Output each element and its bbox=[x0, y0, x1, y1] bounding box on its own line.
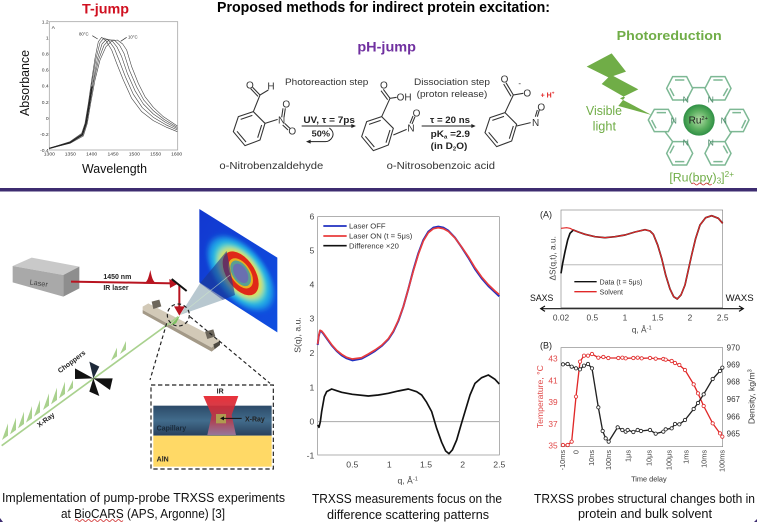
molecule: o-nitrosobenzoate: O bbox=[537, 103, 545, 114]
arrow: photoreaction: 50% bbox=[312, 128, 330, 138]
chart: S(q) scattering curves: 2.5 bbox=[493, 460, 506, 470]
molecule: o-nitrosobenzoate: - bbox=[518, 79, 521, 88]
chart: absorbance vs wavelength: 1600 bbox=[171, 151, 182, 157]
chart: absorbance vs wavelength: 0 bbox=[46, 116, 49, 122]
caption: setup: at BioCARS (APS, Argonne) [3] bbox=[61, 506, 225, 521]
chart: absorbance vs wavelength: 0.4 bbox=[42, 84, 49, 90]
temperature axis: 43 bbox=[548, 354, 558, 364]
time axis: 0 bbox=[571, 450, 580, 454]
arrow: dissociation: a bbox=[444, 135, 447, 141]
caption: structural changes bbox=[534, 491, 755, 521]
label: visible light: Visible bbox=[586, 104, 622, 118]
Ru centre: 2+ bbox=[701, 116, 709, 122]
x-ray beam bbox=[2, 316, 180, 446]
molecule: Ru(bpy)3: N bbox=[721, 116, 727, 126]
axis labels: -1 bbox=[307, 451, 315, 461]
inset: capillary cross-section: X-Ray bbox=[245, 417, 265, 424]
heading: pH-jump: pH-jump bbox=[357, 39, 416, 55]
axis labels: 2 bbox=[310, 348, 315, 358]
molecule: o-nitrobenzaldehyde: N bbox=[278, 116, 285, 127]
legend bbox=[574, 279, 642, 296]
arrow: dissociation: =2.9 bbox=[447, 129, 470, 139]
chart: absorbance vs wavelength bbox=[40, 19, 182, 157]
molecule: o-nitrosobenzoic acid bbox=[362, 81, 421, 151]
caption: structural changes: protein and bulk solvent bbox=[578, 506, 712, 521]
detector image bbox=[199, 209, 277, 332]
temperature axis: 37 bbox=[548, 419, 558, 429]
time axis: 10ms bbox=[700, 450, 709, 468]
panel: photoreduction: light bbox=[593, 120, 616, 134]
legend: Solvent bbox=[600, 289, 623, 296]
axis labels: 2 bbox=[688, 312, 693, 322]
arrow: photoreaction: UV, τ = 7ps bbox=[303, 115, 355, 125]
Ru centre bbox=[683, 104, 715, 136]
molecule: o-nitrobenzaldehyde: O bbox=[288, 127, 296, 138]
chart: absorbance vs wavelength: 80°C bbox=[79, 32, 89, 37]
chart: absorbance vs wavelength: 1 bbox=[46, 35, 49, 41]
molecule: o-nitrosobenzoic acid: O bbox=[380, 81, 388, 92]
caption: setup bbox=[2, 490, 285, 522]
time axis: 1ms bbox=[681, 450, 690, 464]
chart: S(q) scattering curves: 1.5 bbox=[420, 460, 432, 470]
chart: S(q) scattering curves: -1 bbox=[413, 477, 418, 483]
curves bbox=[318, 227, 499, 454]
axis labels: 4 bbox=[310, 280, 315, 290]
chart: absorbance vs wavelength: A bbox=[52, 25, 56, 31]
caption: difference patterns bbox=[312, 491, 502, 522]
formula label: [Ru(bpy) bbox=[669, 171, 715, 185]
panel: TRXSS setup bbox=[2, 209, 277, 469]
caption: difference patterns: TRXSS measurements focus on the bbox=[312, 491, 502, 506]
legend: Laser OFF bbox=[349, 222, 386, 231]
reaction labels bbox=[219, 77, 495, 172]
chart: S(q) scattering curves: 2 bbox=[460, 460, 465, 470]
SAXS WAXS range arrow: SAXS bbox=[530, 293, 553, 303]
time axis: 10μs bbox=[645, 450, 654, 466]
chart B: temperature and density time course: (B) bbox=[540, 340, 552, 350]
axis labels: 1 bbox=[310, 382, 315, 392]
axis labels bbox=[307, 211, 315, 461]
proton label: + H bbox=[541, 92, 552, 99]
capillary stage bbox=[143, 300, 220, 352]
inset: capillary cross-section: Capillary bbox=[157, 426, 186, 433]
x axis label: Wavelength bbox=[82, 162, 147, 176]
panel: photoreduction bbox=[586, 29, 749, 186]
temperature axis: 35 bbox=[548, 441, 558, 451]
curves bbox=[561, 216, 723, 299]
reaction labels: Photoreaction step bbox=[285, 77, 368, 87]
time axis bbox=[558, 450, 727, 484]
chart A: difference signal vs solvent bbox=[530, 210, 754, 334]
axis labels: 2.5 bbox=[717, 312, 729, 322]
panel: pH-jump bbox=[219, 39, 555, 172]
molecule: Ru(bpy)3: N bbox=[708, 94, 714, 104]
corner marks bbox=[0, 518, 757, 522]
time axis: 1μs bbox=[624, 450, 633, 462]
chart: absorbance vs wavelength: 1550 bbox=[150, 151, 161, 157]
heading: T-jump: T-jump bbox=[82, 0, 129, 16]
laser beam arrow bbox=[71, 270, 185, 316]
axis labels: 1.5 bbox=[652, 312, 664, 322]
time axis: Time delay bbox=[631, 475, 667, 484]
chart: absorbance vs wavelength: 1450 bbox=[107, 151, 119, 157]
panel: T-jump bbox=[18, 0, 182, 176]
heading: Photoreduction: Photoreduction bbox=[617, 29, 722, 43]
arrow: dissociation: 2 bbox=[453, 147, 456, 153]
temperature axis: 41 bbox=[548, 375, 558, 385]
density axis: 966 bbox=[727, 412, 741, 421]
divider band bbox=[0, 188, 757, 192]
chart: absorbance vs wavelength: -0.2 bbox=[40, 132, 49, 138]
SAXS WAXS range arrow: WAXS bbox=[726, 293, 754, 303]
axis labels: ΔS(q,t), a.u. bbox=[548, 236, 558, 281]
chart A: difference signal vs solvent: (A) bbox=[540, 210, 552, 220]
proton label: + bbox=[552, 91, 555, 96]
arrow: dissociation: τ = 20 ns bbox=[430, 115, 470, 125]
time axis: 100ns bbox=[604, 450, 613, 470]
density axis: 967 bbox=[727, 395, 741, 404]
molecule: o-nitrosobenzoic acid: N bbox=[407, 124, 415, 135]
time axis: 100μs bbox=[664, 450, 673, 470]
laser box bbox=[13, 258, 79, 297]
molecule: o-nitrosobenzoate: O bbox=[523, 89, 531, 100]
formula label: 2+ bbox=[725, 170, 734, 179]
inset: capillary cross-section bbox=[151, 385, 273, 469]
legend: Difference ×20 bbox=[349, 241, 399, 250]
zoom circle and guide lines bbox=[150, 304, 270, 383]
laser box: Laser bbox=[29, 277, 49, 289]
arrow: dissociation: O) bbox=[456, 141, 467, 151]
chart: absorbance vs wavelength: 0.8 bbox=[42, 51, 49, 57]
inset: capillary cross-section: IR bbox=[217, 388, 224, 395]
chart B: temperature and density time course bbox=[535, 340, 756, 484]
molecule: Ru(bpy)3: N bbox=[683, 94, 689, 104]
chopper label: Choppers bbox=[57, 350, 87, 375]
chart: S(q) scattering curves bbox=[293, 211, 506, 485]
axis labels: 1 bbox=[623, 312, 628, 322]
x-ray label: X-Ray bbox=[36, 412, 56, 429]
chart: absorbance vs wavelength: 10°C bbox=[128, 35, 138, 40]
axis labels: 3 bbox=[310, 314, 315, 324]
reaction labels: (proton release) bbox=[417, 89, 487, 99]
caption: setup: Implementation of pump-probe TRXSS experiments bbox=[2, 490, 285, 505]
arrow: dissociation: (in D bbox=[431, 141, 451, 151]
time axis: 100ms bbox=[718, 450, 727, 472]
chart: absorbance vs wavelength: -0.4 bbox=[40, 148, 49, 154]
density axis: 970 bbox=[727, 343, 741, 352]
temperature axis: Temperature, °C bbox=[535, 365, 545, 428]
chart: S(q) scattering curves: S(q), a.u. bbox=[293, 317, 303, 353]
chart: absorbance vs wavelength: 1350 bbox=[65, 151, 76, 157]
axis labels: q, Å bbox=[632, 324, 647, 334]
molecule: Ru(bpy)3: N bbox=[683, 137, 689, 147]
chart: absorbance vs wavelength: 1.2 bbox=[42, 19, 49, 25]
temperature axis bbox=[535, 354, 558, 451]
time axis: -10ms bbox=[558, 450, 567, 470]
time axis: 10ns bbox=[587, 450, 596, 466]
chart: S(q) scattering curves: q, Å bbox=[397, 475, 413, 485]
laser label: IR laser bbox=[103, 285, 129, 292]
chart: absorbance vs wavelength: 1400 bbox=[86, 151, 97, 157]
axis labels: 0 bbox=[310, 417, 315, 427]
axis labels: -1 bbox=[647, 326, 652, 332]
axis labels: 0.02 bbox=[553, 312, 569, 322]
molecule: o-nitrosobenzoic acid: O bbox=[413, 109, 421, 120]
molecule: o-nitrobenzaldehyde: O bbox=[246, 81, 254, 92]
chart: absorbance vs wavelength: 1300 bbox=[44, 151, 55, 157]
molecule: o-nitrobenzaldehyde: H bbox=[267, 81, 275, 92]
legend: Data (t = 5μs) bbox=[600, 279, 642, 286]
molecule: Ru(bpy)3 bbox=[648, 77, 749, 165]
molecule: o-nitrobenzaldehyde: O bbox=[282, 100, 290, 111]
axis labels: 0.5 bbox=[587, 312, 598, 322]
chart: S(q) scattering curves: 0.5 bbox=[346, 460, 359, 470]
caption: difference patterns: difference scattering patterns bbox=[327, 507, 489, 522]
formula label: ] bbox=[721, 171, 725, 185]
temperature series bbox=[561, 352, 724, 447]
mirror bbox=[172, 279, 187, 291]
axis labels: 6 bbox=[310, 211, 315, 221]
chart: S(q) scattering curves: 1 bbox=[387, 460, 392, 470]
arrow: dissociation: pK bbox=[431, 129, 443, 139]
legend bbox=[323, 222, 413, 250]
inset: capillary cross-section: AlN bbox=[157, 457, 169, 464]
Ru centre: Ru bbox=[689, 115, 701, 126]
temperature axis: 39 bbox=[548, 397, 558, 407]
scattering cone bbox=[180, 251, 235, 315]
chopper icon bbox=[75, 362, 113, 396]
axis labels: 5 bbox=[310, 246, 315, 256]
chart: absorbance vs wavelength: 0.6 bbox=[42, 68, 49, 74]
formula label: 3 bbox=[717, 177, 722, 186]
molecule: o-nitrosobenzoic acid: OH bbox=[397, 92, 412, 103]
arrow: photoreaction bbox=[302, 115, 356, 144]
molecule: o-nitrosobenzoate bbox=[485, 74, 545, 147]
y axis label: Absorbance bbox=[18, 50, 32, 116]
reaction labels: o-Nitrobenzaldehyde bbox=[219, 161, 324, 172]
molecule: Ru(bpy)3: N bbox=[671, 116, 677, 126]
density axis: 968 bbox=[727, 378, 741, 387]
axis labels bbox=[548, 236, 729, 334]
density axis bbox=[727, 343, 756, 438]
legend: Laser ON (t = 5μs) bbox=[349, 232, 413, 241]
SAXS WAXS range arrow bbox=[530, 293, 754, 311]
molecule: o-nitrobenzaldehyde bbox=[233, 81, 296, 146]
molecule: o-nitrosobenzoate: O bbox=[501, 74, 509, 85]
main title: Proposed methods for indirect protein excitation: bbox=[217, 0, 550, 16]
density axis: 969 bbox=[727, 361, 741, 370]
molecule: Ru(bpy)3: N bbox=[708, 137, 714, 147]
reaction labels: Dissociation step bbox=[414, 77, 490, 87]
density axis: 965 bbox=[727, 429, 741, 438]
arrow: dissociation bbox=[422, 115, 476, 153]
density series bbox=[561, 362, 724, 443]
molecule: o-nitrosobenzoate: N bbox=[532, 118, 539, 129]
density axis: Density, kg/m bbox=[746, 372, 756, 424]
chart: absorbance vs wavelength: 1500 bbox=[129, 151, 140, 157]
chart: absorbance vs wavelength: 0.2 bbox=[42, 100, 49, 106]
laser label: 1450 nm bbox=[103, 274, 131, 281]
reaction labels: o-Nitrosobenzoic acid bbox=[387, 161, 495, 172]
density axis: 3 bbox=[747, 369, 753, 372]
icon: lightning bolt bbox=[587, 53, 652, 115]
